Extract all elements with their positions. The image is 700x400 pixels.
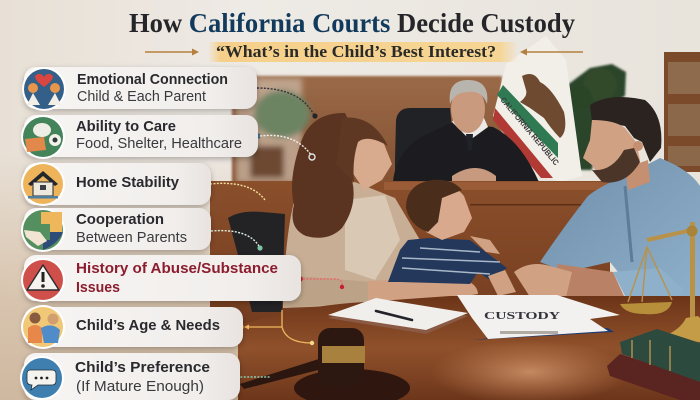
- item: home stability: [21, 162, 211, 206]
- item: ability to care: [21, 115, 258, 159]
- left black chair: [228, 212, 285, 312]
- item: emotional connection: [22, 67, 257, 111]
- item: child's age and needs: Child’s Age & Needs: [76, 317, 220, 334]
- item: cooperation: Cooperation: [76, 211, 164, 228]
- item: child's preference: Child’s Preference: [75, 359, 210, 376]
- icon: handshake and puzzle: [21, 208, 65, 252]
- woman: [283, 113, 478, 308]
- item: child's preference: [20, 353, 240, 400]
- bookshelf: [664, 52, 700, 172]
- title: How California Courts Decide Custody: [129, 8, 575, 38]
- item: history of abuse or substance issues: Issues: [76, 279, 120, 296]
- item: ability to care: Ability to Care: [76, 118, 176, 135]
- item: child's age and needs: [21, 305, 243, 349]
- judge chair: [395, 108, 456, 170]
- scales of justice: [620, 222, 700, 342]
- custody document: CUSTODY: [484, 311, 561, 322]
- connector: home stability: [203, 181, 265, 200]
- courtroom table: [238, 296, 700, 400]
- connector: cooperation: [204, 228, 263, 251]
- icon: heart and family: [22, 67, 66, 111]
- arrow: left of subtitle: [145, 48, 199, 56]
- judge: [393, 80, 540, 184]
- table reflection: [430, 340, 630, 400]
- subtitle banner: “What’s in the Child’s Best Interest?: [216, 42, 496, 61]
- blurred plant on the left: [236, 78, 310, 183]
- item: ability to care: Food, Shelter, Healthcare: [76, 135, 242, 152]
- arrow: right of subtitle: [520, 48, 583, 56]
- connector: history of abuse: [297, 276, 344, 289]
- gavel: [240, 328, 410, 400]
- boy: [388, 180, 516, 296]
- law books: [607, 329, 700, 400]
- icon: hand with magnifier: [21, 115, 65, 159]
- California flag: [493, 36, 582, 182]
- connector: child's preference: [230, 374, 270, 380]
- custody document: [457, 295, 620, 340]
- item: cooperation: [21, 208, 211, 252]
- man: [514, 97, 700, 300]
- item: emotional connection: Child & Each Parent: [77, 88, 207, 105]
- item: history of abuse or substance issues: [21, 255, 301, 302]
- item: emotional connection: Emotional Connection: [77, 71, 228, 88]
- connector: emotional connection: [257, 88, 318, 119]
- connector: child's age and needs: [238, 310, 314, 345]
- notepad and pen: [328, 298, 468, 334]
- connector: ability to care: [255, 133, 315, 160]
- plant behind the man: [566, 64, 626, 170]
- item: home stability: Home Stability: [76, 174, 180, 191]
- item: child's preference: (If Mature Enough): [76, 378, 204, 395]
- icon: two children: [21, 305, 65, 349]
- icon: warning triangle: [21, 258, 65, 302]
- item: history of abuse or substance issues: History of Abuse/Substance: [76, 260, 278, 277]
- wood wall panel: [232, 76, 502, 188]
- judge bench: [210, 181, 610, 331]
- icon: house: [21, 162, 65, 206]
- California flag: CALIFORNIA REPUBLIC: [498, 96, 561, 167]
- left wall shading: [0, 150, 240, 400]
- item: cooperation: Between Parents: [76, 229, 187, 246]
- icon: speech bubble: [20, 356, 64, 400]
